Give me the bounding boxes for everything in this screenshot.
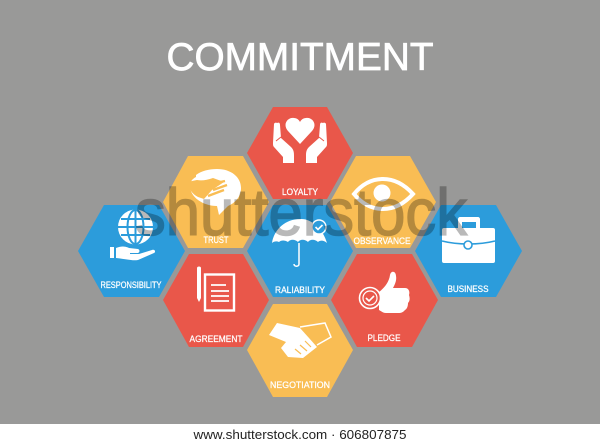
label: trust: TRUST	[204, 235, 229, 245]
footer url: www.shutterstock.com · 606807875	[192, 427, 406, 442]
panel: pledge	[331, 254, 438, 347]
icon: eye	[354, 179, 413, 209]
icon: thumbs up with check	[360, 272, 410, 313]
title: COMMITMENT	[166, 36, 434, 79]
label: observance: OBSERVANCE	[354, 236, 410, 246]
icon: umbrella with check	[272, 219, 327, 266]
panel: raliability	[247, 205, 353, 297]
label: negotiation: NEGOTIATION	[270, 380, 330, 390]
icon: heart in hands	[273, 118, 327, 163]
label: loyalty: LOYALTY	[282, 187, 318, 197]
panel: observance	[330, 156, 436, 248]
panel: responsibility	[78, 205, 185, 297]
panel: agreement	[163, 254, 269, 347]
icon: globe in hand	[110, 210, 155, 260]
panel: business	[415, 205, 522, 297]
label: raliability: RALIABILITY	[275, 285, 325, 295]
label: agreement: AGREEMENT	[190, 334, 243, 344]
panel: negotiation	[247, 304, 353, 397]
label: pledge: PLEDGE	[368, 333, 400, 343]
icon: hand in speech bubble	[187, 169, 241, 215]
panel: trust	[163, 156, 269, 248]
icon: briefcase	[442, 217, 495, 263]
label: responsibility: RESPONSIBILITY	[100, 280, 162, 290]
icon: handshake	[269, 323, 331, 358]
panel: loyalty	[247, 107, 353, 199]
watermark: shutterstock	[135, 175, 468, 249]
label: business: BUSINESS	[448, 284, 488, 294]
icon: document and pen	[197, 266, 234, 310]
